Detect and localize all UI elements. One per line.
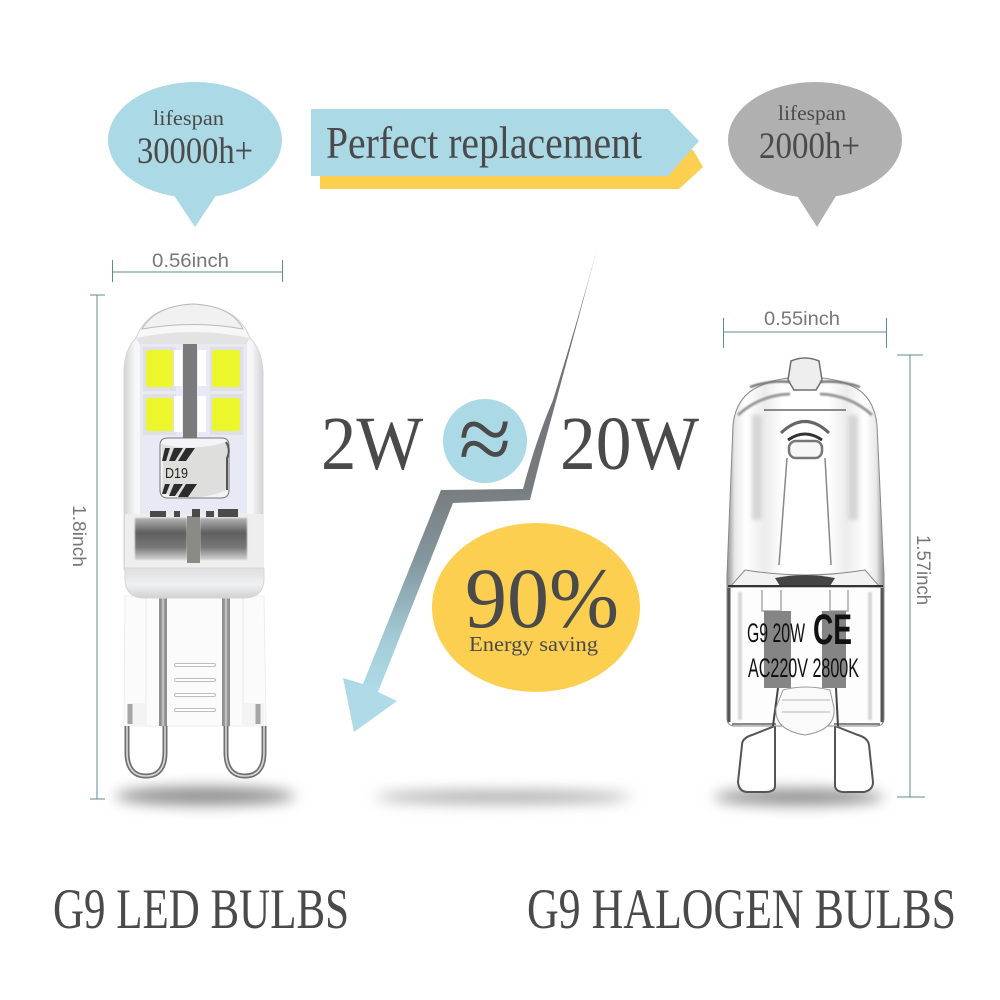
dimension: halogen height: 1.57inch — [912, 535, 933, 605]
capacitor: D19 — [165, 465, 188, 482]
label: LED bulbs: G9 LED BULBS — [53, 878, 349, 941]
approximately icon — [443, 385, 527, 492]
halogen shoulder reflections — [738, 382, 872, 565]
LED chips — [143, 347, 243, 435]
halogen label: AC220V 2800K — [748, 653, 859, 683]
halogen seal band — [728, 570, 883, 725]
halogen pins — [738, 726, 873, 792]
shadow under LED bulb — [115, 787, 295, 805]
halogen label: G9 20W — [747, 618, 805, 648]
speech bubble: LED lifespan: lifespan — [153, 106, 225, 130]
speech bubble: LED lifespan: 30000h+ — [137, 131, 253, 172]
halogen tip — [788, 358, 822, 390]
speech bubble: halogen lifespan: lifespan — [778, 101, 847, 125]
energy saving badge: 90% — [465, 550, 619, 646]
approximately icon: ≈ — [459, 385, 511, 492]
shadow under halogen bulb — [714, 789, 884, 805]
LED dome — [142, 304, 243, 329]
halogen foil strips — [762, 590, 848, 735]
wattage comparison: 20W — [560, 402, 699, 486]
collar — [125, 568, 264, 598]
wattage comparison: 2W — [321, 402, 423, 486]
dimension: halogen height — [897, 355, 933, 797]
socket contacts — [125, 509, 264, 568]
dimension: halogen width — [723, 309, 887, 348]
centre wire — [183, 344, 197, 438]
energy saving badge — [432, 523, 640, 692]
banner arrow: Perfect replacement — [311, 109, 703, 189]
LED base and pins — [124, 596, 266, 776]
halogen label — [747, 606, 859, 683]
wattage comparison — [321, 385, 699, 492]
dimension: LED height: 1.8inch — [69, 505, 89, 567]
halogen label: CE — [813, 606, 852, 654]
circuit board — [140, 344, 247, 516]
speech bubble: halogen lifespan — [728, 82, 902, 227]
speech bubble: halogen lifespan: 2000h+ — [759, 126, 860, 167]
halogen capsule — [727, 378, 884, 726]
capacitor — [160, 438, 229, 498]
LED bulb — [124, 304, 266, 776]
speech bubble: LED lifespan — [108, 82, 282, 227]
dimension: LED width — [112, 251, 283, 282]
shadow centre — [375, 791, 631, 803]
banner arrow: Perfect replacement: Perfect replacement — [326, 117, 642, 168]
dimension: LED width: 0.56inch — [152, 251, 229, 272]
energy saving badge: Energy saving — [469, 632, 599, 656]
dimension: halogen width: 0.55inch — [764, 309, 840, 330]
LED glass capsule — [124, 304, 263, 570]
halogen bulb — [727, 358, 884, 792]
dimension: LED height — [69, 295, 105, 799]
stepped arrow — [343, 238, 600, 732]
